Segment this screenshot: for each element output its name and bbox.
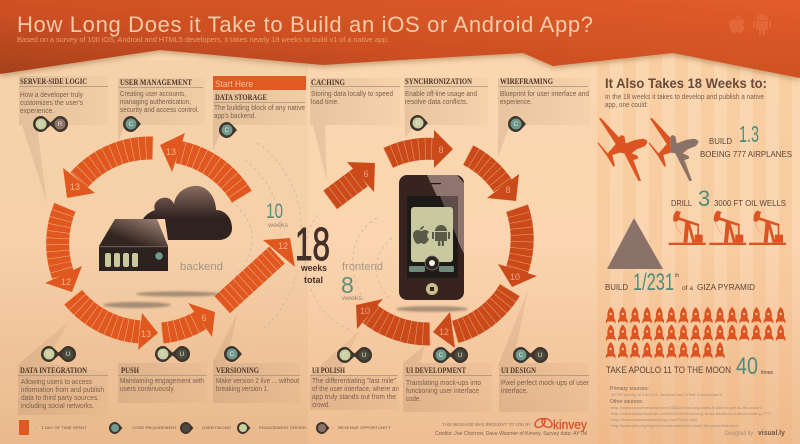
stat: pyramid: 1/231 — [633, 269, 674, 296]
arrow: wireframing 8: 8 — [505, 185, 511, 195]
legend: one day: 1 DAY OF TIME SPENT — [41, 425, 88, 430]
badges: C — [439, 352, 444, 359]
heading: UI DEVELOPMENT — [406, 365, 466, 375]
right panel intro: In the 18 weeks it takes to develop and publish a native — [605, 94, 764, 101]
description: users continuously. — [120, 386, 175, 393]
heading: CACHING — [311, 77, 345, 87]
header banner — [0, 0, 800, 78]
badges: U — [538, 352, 543, 359]
arrow: synchronization 8: 8 — [438, 145, 444, 155]
stat: boeing: BUILD — [709, 137, 732, 146]
stat: pyramid: th — [675, 273, 679, 279]
panel: user management — [118, 77, 205, 142]
badges: U — [458, 352, 463, 359]
backend 10 weeks: weeks — [267, 222, 289, 229]
icon: rockets — [606, 307, 786, 358]
backend label: backend — [180, 261, 223, 273]
arrow: caching 6: 6 — [363, 169, 369, 179]
description: app truly stands out from the — [312, 394, 396, 401]
dashed guide arcs — [232, 143, 392, 330]
arrow: ui development 12: 12 — [439, 327, 449, 337]
badges — [337, 347, 372, 363]
arrow: versioning 12: 12 — [278, 241, 288, 251]
legend: one day — [19, 420, 88, 435]
frontend 8 weeks: frontend — [342, 261, 383, 273]
arrow: push 6 — [162, 303, 215, 337]
legend: core requirement — [109, 422, 178, 434]
arrow: caching-side 13 — [160, 133, 242, 197]
sources: http://www.universetoday.com/13562/how-long-does-it-take-to-get-to-the-moon/ — [611, 405, 763, 410]
stat: apollo — [606, 353, 773, 380]
kinvey logo — [533, 417, 554, 429]
stat: apollo: TAKE APOLLO 11 TO THE MOON — [606, 365, 731, 376]
description: Creating user accounts, — [120, 91, 186, 98]
description: information from and publish — [21, 387, 104, 394]
panel: ui development — [403, 345, 492, 412]
badges: E — [343, 352, 348, 359]
heading: UI POLISH — [312, 365, 345, 375]
icon: pyramid — [607, 218, 663, 269]
stat: apollo: times — [761, 370, 773, 376]
description: How a developer truly — [20, 92, 83, 99]
heading: DATA INTEGRATION — [20, 365, 88, 375]
18 weeks total — [295, 218, 330, 285]
panel: server-side logic — [19, 76, 108, 203]
backend ring of arrows — [45, 133, 295, 350]
frontend 8 weeks: 8 — [341, 272, 354, 298]
heading: SYNCHRONIZATION — [405, 76, 473, 86]
description: customizes the user's — [20, 100, 83, 107]
18 weeks total: total — [304, 275, 323, 285]
description: security and access control. — [120, 107, 199, 114]
stat: oil wells: DRILL — [671, 199, 692, 208]
description: app's backend. — [214, 113, 256, 120]
description: experience. — [20, 108, 54, 115]
stat: boeing: BOEING 777 AIRPLANES — [700, 150, 792, 159]
badge: E — [416, 120, 421, 127]
18 weeks total: weeks — [300, 263, 327, 273]
badge: C — [514, 121, 519, 128]
description: of the user interface, where an — [312, 386, 399, 393]
panel: ui polish — [310, 330, 399, 410]
kinvey credit: THIS MESSAGE WAS BROUGHT TO YOU BY — [442, 422, 531, 427]
sources — [610, 386, 772, 428]
heading: UI DESIGN — [501, 365, 537, 375]
legend: engagement driver — [237, 422, 306, 434]
badges — [513, 347, 548, 363]
sources: AYTM survey of 100 iOS, Android and HTML 5 developers — [611, 392, 722, 397]
backend 10 weeks: 10 — [266, 200, 283, 223]
heading: DATA STORAGE — [215, 92, 267, 102]
icon: phone — [399, 175, 464, 300]
description: Allowing users to access — [21, 379, 92, 386]
stat: boeing: 1.3 — [739, 121, 759, 147]
panel: versioning — [213, 312, 300, 403]
description: code. — [406, 396, 421, 403]
badge: C — [129, 121, 134, 128]
icon: airplanes — [598, 118, 698, 181]
stat: pyramid: of a — [682, 285, 693, 292]
legend: engagement driver: ENGAGEMENT DRIVER — [259, 425, 306, 430]
shadows under floating arrows — [103, 291, 468, 312]
panel: data storage — [213, 76, 306, 150]
sources: Other sources: — [610, 399, 643, 405]
backend side tint — [0, 60, 308, 444]
arrow: server-side 12: 12 — [61, 277, 71, 287]
legend: revenue opportunity — [316, 422, 391, 434]
arrow: wireframing 8 — [468, 155, 519, 201]
arrow: ui development 12 — [433, 290, 510, 348]
kinvey credit: kinvey — [553, 417, 587, 432]
badge: C — [230, 351, 235, 358]
arrow: push 6: 6 — [201, 313, 207, 323]
sources: http://www.airlinereporter.com/2012/01/how-long-does-it-take-to-build-a-boeing-777/ — [611, 411, 772, 416]
heading: VERSIONING — [216, 365, 259, 375]
badges — [41, 346, 76, 362]
arrow: ui design 10: 10 — [510, 272, 520, 282]
legend: core requirement: CORE REQUIREMENT — [132, 425, 178, 430]
stat: pyramid: BUILD — [605, 283, 628, 292]
description: data to third party sources, — [21, 395, 99, 402]
heading: PUSH — [121, 365, 139, 375]
icon: server — [99, 219, 168, 271]
sources: http://www.cedarvalleyenergy.com/FAQs.htm — [611, 417, 698, 422]
description: managing authentication, — [120, 99, 191, 106]
panel: ui design — [499, 290, 590, 412]
description: load time. — [311, 99, 339, 106]
right panel intro: app, one could: — [605, 102, 648, 109]
stat: pyramid — [605, 269, 755, 296]
badges — [33, 116, 68, 132]
legend: revenue opportunity: - — [332, 425, 334, 430]
designed by visual.ly: visual.ly — [758, 430, 785, 437]
description: Make version 2 live ... without — [216, 378, 299, 385]
description: The building block of any native — [214, 105, 305, 112]
description: functioning user interface — [406, 388, 479, 395]
icon: cloud — [143, 186, 232, 240]
stat: oil wells: 3 — [698, 186, 710, 211]
stat: boeing — [700, 121, 792, 159]
arrow: data integration 13: 13 — [141, 329, 151, 339]
badges: E — [161, 351, 166, 358]
kinvey credit — [435, 417, 587, 437]
sources: Primary sources: — [610, 386, 649, 392]
description: Pixel perfect mock-ups of user — [501, 380, 590, 387]
start here label: Start Here — [215, 79, 253, 90]
legend: user facing: - — [196, 425, 198, 430]
sources: http://www.pbs.org/wgbh/nova/ancient/who-built-the-pyramids.html — [611, 423, 738, 428]
description: resolve data conflicts. — [405, 99, 468, 106]
description: including social networks. — [21, 403, 94, 410]
stat: oil wells: 3000 FT OIL WELLS — [714, 199, 786, 208]
arrow: user management 13: 13 — [70, 182, 80, 192]
badges: E — [39, 121, 44, 128]
badges: U — [66, 351, 71, 358]
panel: push — [118, 346, 207, 403]
heading: SERVER-SIDE LOGIC — [20, 76, 87, 86]
designed by visual.ly — [725, 430, 785, 437]
arrow: caching 6 — [330, 162, 375, 200]
icon: apple — [729, 15, 745, 33]
title: How Long Does it Take to Build an iOS or Android App? — [17, 12, 593, 37]
badges: E — [47, 351, 52, 358]
description: Enable off-line usage and — [405, 91, 477, 98]
arrow: ui design 10 — [498, 208, 537, 287]
icon: android — [432, 225, 450, 246]
stat: pyramid: GIZA PYRAMID — [697, 283, 755, 292]
description: crowd. — [312, 402, 330, 409]
badges: R — [58, 121, 63, 128]
legend — [19, 420, 391, 435]
badges — [433, 347, 468, 363]
arrow: server-side 12 — [45, 207, 82, 292]
heading: USER MANAGEMENT — [120, 77, 192, 87]
badges — [155, 346, 190, 362]
arrow: versioning 12 — [222, 238, 295, 305]
badges: C — [519, 352, 524, 359]
right panel heading: It Also Takes 18 Weeks to: — [605, 76, 767, 91]
description: Translating mock-ups into — [406, 380, 481, 387]
stat: apollo: 40 — [736, 353, 758, 380]
kinvey credit: Credits: Joe Chernov, Dave Wasmer of Kinvey. Survey data: AYTM — [435, 431, 587, 437]
description: interface. — [501, 388, 528, 395]
legend: one day: - — [35, 425, 37, 430]
description: The differentiating "last mile" — [312, 378, 396, 385]
badges: U — [362, 352, 367, 359]
panel: caching — [310, 77, 400, 182]
arrow: data integration 13 — [73, 297, 158, 350]
frontend 8 weeks — [341, 261, 383, 302]
panel: wireframing — [498, 76, 590, 157]
heading: WIREFRAMING — [500, 76, 553, 86]
legend: user facing: USER FACING — [202, 425, 231, 430]
panel: data integration — [18, 320, 108, 415]
arrow: ui polish 10 — [356, 299, 430, 334]
arrow: user management 13 — [63, 148, 153, 198]
arrow: synchronization 8 — [388, 130, 453, 168]
description: breaking version 1. — [216, 386, 269, 393]
legend: core requirement: - — [125, 425, 127, 430]
description: Blueprint for user interface and — [500, 91, 589, 98]
legend: user facing — [180, 422, 231, 434]
panel: synchronization — [404, 76, 488, 138]
description: Storing data locally to speed — [311, 91, 393, 98]
icon: oil pumps — [669, 211, 786, 245]
description: experience. — [500, 99, 532, 106]
arrow: caching-side 13: 13 — [166, 147, 176, 157]
legend: revenue opportunity: REVENUE OPPORTUNITY — [338, 425, 391, 430]
frontend ring of arrows — [330, 130, 537, 348]
18 weeks total: 18 — [295, 218, 330, 270]
icon: android — [753, 14, 771, 35]
description: Maintaining engagement with — [120, 378, 204, 385]
designed by visual.ly: Designed by — [725, 431, 753, 437]
right panel striped background — [597, 50, 800, 444]
arrow: ui polish 10: 10 — [360, 306, 370, 316]
legend: engagement driver: - — [253, 425, 255, 430]
subtitle: Based on a survey of 100 iOS, Android and HTML5 developers, it takes nearly 18 weeks to build v1 of a native app. — [17, 35, 389, 44]
frontend 8 weeks: weeks — [341, 295, 363, 302]
stat: oil wells — [671, 186, 786, 211]
badges: U — [180, 351, 185, 358]
badge: C — [225, 127, 230, 134]
icon: apple — [413, 226, 429, 244]
